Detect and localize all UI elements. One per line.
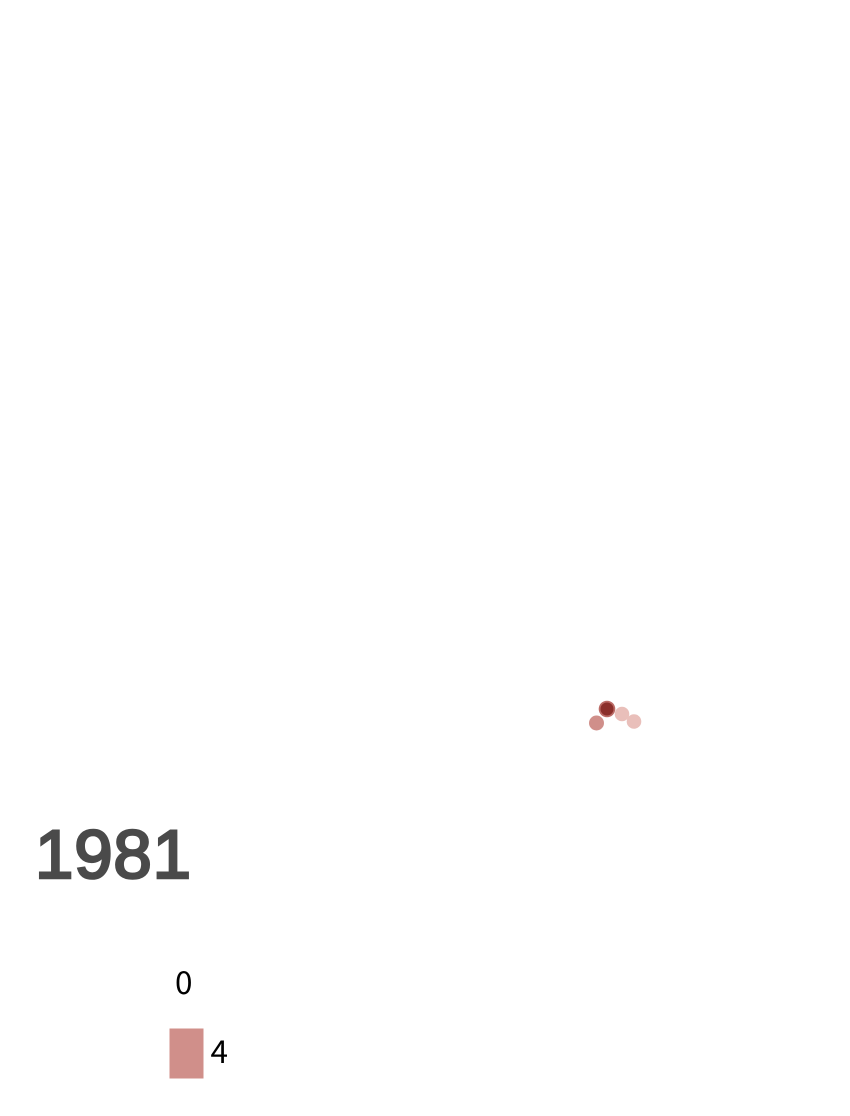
point: medium, left [589, 716, 604, 730]
legend label: 0: 0 [175, 958, 192, 1004]
year heading: 1981 [35, 816, 191, 893]
point: light, far right [627, 714, 641, 729]
map points [589, 701, 641, 730]
point: dark, overlapping [599, 701, 615, 717]
legend label: 4: 4 [210, 1027, 228, 1073]
legend [170, 958, 228, 1078]
point: light, centre right [615, 707, 629, 721]
legend swatch [170, 1028, 204, 1078]
